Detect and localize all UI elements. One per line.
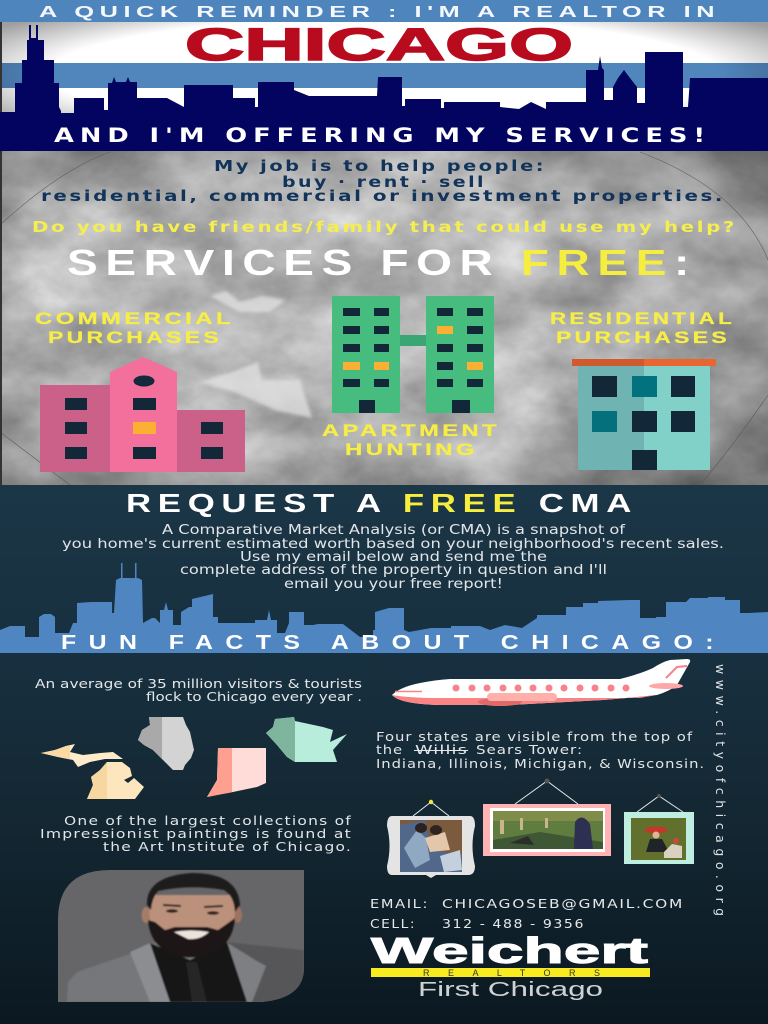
map: Michigan [41,744,144,799]
fact: impressionist paintings: One of the largest collections of [64,813,352,828]
panel: services on grey watercolour [0,151,768,485]
contact details [370,896,684,931]
label: apartment hunting: HUNTING [345,440,478,459]
fact: impressionist paintings [40,813,352,854]
CMA explanation text: you home's current estimated worth based on your neighborhood's recent sales. [62,537,724,552]
icon: commercial building [40,357,245,472]
label: commercial purchases: COMMERCIAL [35,309,234,328]
fact: four states: Indiana, Illinois, Michigan, & Wisconsin. [376,756,705,771]
beard [148,918,235,958]
label: residential purchases [550,309,735,347]
fact: four states: Four states are visible from the top of [376,729,693,744]
heading: services for free: SERVICES FOR FREE : [67,242,697,283]
logo: Weichert Realtors First Chicago: Weichert [371,930,648,971]
job description [41,157,725,205]
navy city skyline [0,25,768,152]
label: residential purchases: PURCHASES [556,328,730,347]
smile and eyes [174,930,209,939]
question line: Do you have friends/family that could use my help? [32,218,737,236]
logo: Weichert Realtors First Chicago [371,930,650,1001]
face [148,894,236,931]
label: commercial purchases [35,309,234,347]
label: apartment hunting: APARTMENT [322,421,500,440]
heading: Chicago: CHICAGO [185,19,573,70]
heading: fun facts: FUN FACTS ABOUT CHICAGO: [61,632,726,654]
logo: Weichert Realtors First Chicago: First Chicago [418,979,603,1001]
hair [147,873,240,912]
label: apartment hunting [322,421,500,459]
fact: visitors: An average of 35 million visitors & tourists [35,676,362,691]
blue city skyline [0,563,768,653]
CMA explanation text [62,523,724,592]
contact details: EMAIL: [370,896,429,911]
job description: residential, commercial or investment properties. [41,187,725,205]
CMA explanation text: Use my email below and send me the [240,550,547,565]
painting: framed Seurat park scene [483,778,611,856]
job description: My job is to help people: [214,157,546,175]
icon: residential building [572,359,716,470]
fact: four states: Willis [415,742,468,757]
CMA explanation text: complete address of the property in question and I'll [180,563,607,578]
contact details: 312 - 488 - 9356 [442,916,585,931]
jacket [67,942,196,1002]
label: residential purchases: RESIDENTIAL [550,309,735,328]
map: Wisconsin [266,717,347,762]
painting: framed Renoir two sisters [624,794,694,864]
icon: apartment towers [332,296,494,413]
CMA explanation text: A Comparative Market Analysis (or CMA) is a snapshot of [162,523,626,538]
portrait photo of realtor [58,870,304,1002]
job description: buy · rent · sell [282,173,486,191]
contact details: CHICAGOSEB@GMAIL.COM [442,896,684,911]
fact: impressionist paintings: the Art Institute of Chicago. [103,839,352,854]
fact: four states [376,729,705,771]
ears [142,907,150,923]
top banner: reminder: A QUICK REMINDER : I'M A REALTOR IN [39,4,720,21]
icons: four state maps [41,717,347,799]
heading: request a free CMA: REQUEST A FREE CMA [126,488,638,518]
fact: impressionist paintings: Impressionist paintings is found at [40,826,352,841]
contact details: CELL: [370,916,416,931]
fact: four states: Sears Tower: [476,742,583,757]
fact: four states: the [376,742,403,757]
fact: visitors: flock to Chicago every year . [146,689,362,704]
fact: visitors [35,676,362,704]
tagline: offering services: AND I'M OFFERING MY SERVICES! [54,124,711,147]
top banner: reminder [0,0,768,22]
vertical website text: www.cityofchicago.org [713,664,728,916]
icon: airplane [392,659,690,706]
map: Indiana [207,748,266,797]
label: commercial purchases: PURCHASES [48,328,222,347]
map: Illinois [138,717,194,770]
hero panel: Chicago flag skyline [0,19,768,152]
panel: dark lower section [0,485,768,1024]
logo: Weichert Realtors First Chicago: REALTORS [423,968,600,978]
painting: framed mother and child [387,800,475,878]
CMA explanation text: email you your free report! [284,577,503,592]
